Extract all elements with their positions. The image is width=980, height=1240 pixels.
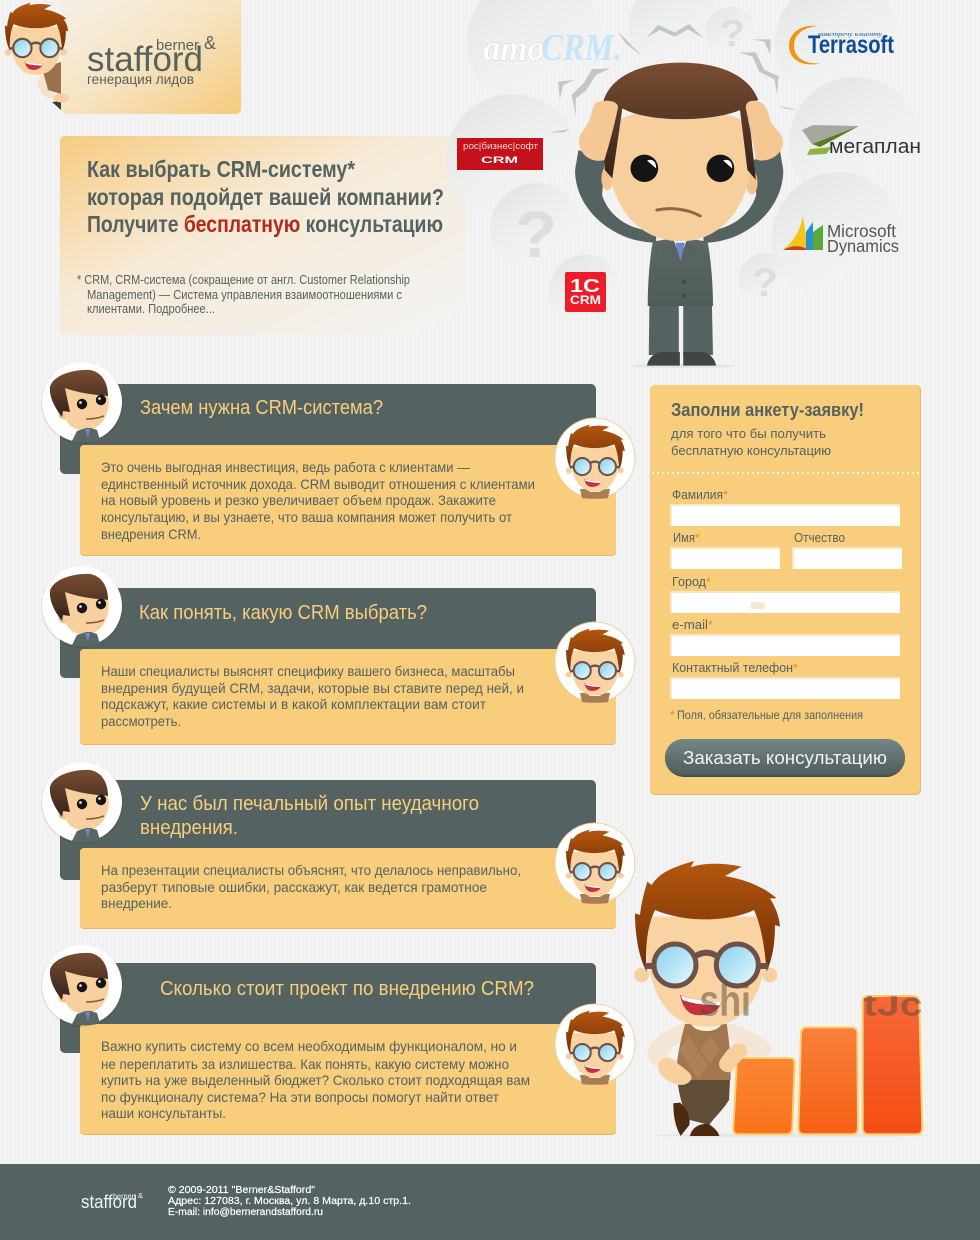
footer contacts: Адрес: 127083, г. Москва, ул. 8 Марта, д.10 стр.1. (168, 1196, 411, 1207)
answer card: внедрения будущей CRM, задачи, которые вы ставите перед ней, и (101, 680, 524, 696)
logo: Microsoft Dynamics: Dynamics (827, 236, 899, 256)
logo panel (5, 0, 241, 114)
answer card (80, 848, 616, 929)
answer card: рассмотреть. (101, 713, 181, 729)
logo: 1C CRM (565, 272, 606, 312)
stock watermark: tJc (863, 987, 923, 1024)
answer card: на новый уровень и резко увеличивает объем продаж. Закажите (101, 492, 496, 508)
logo: Terrasoft (789, 26, 895, 64)
head (634, 861, 780, 1027)
legs and shoes (647, 305, 716, 366)
logo: amoCRM (483, 27, 622, 69)
hands (579, 101, 783, 161)
answer card: Важно купить систему со всем необходимым функционалом, но и (101, 1038, 517, 1054)
arms (575, 150, 783, 243)
field: last name: Фамилия (672, 488, 723, 502)
answer card: Это очень выгодная инвестиция, ведь работа с клиентами — (101, 459, 470, 475)
field: patronymic (792, 531, 902, 569)
answer card (80, 445, 616, 556)
answer card: внедрение. (101, 895, 172, 911)
field: patronymic: Отчество (794, 531, 845, 545)
footer logo: berner (113, 1191, 134, 1201)
hero heading line 2: которая подойдет вашей компании? (87, 184, 444, 210)
hero heading line 3: Получите бесплатную консультацию (87, 211, 443, 237)
stock watermark (700, 984, 922, 1016)
avatar: consultant (554, 418, 636, 499)
question marks: ? (515, 197, 557, 271)
question marks (515, 13, 778, 305)
question heading: Как понять, какую CRM выбрать? (139, 602, 427, 624)
form intro: бесплатную консультацию (671, 444, 831, 458)
CRM footnote: Management) — Система управления взаимоотношениями с (87, 288, 402, 302)
torso (648, 238, 713, 306)
logo: Terrasoft: навстречу клиенту (818, 31, 882, 38)
logo: Microsoft Dynamics: Microsoft (827, 221, 896, 241)
logo: Megaplan (802, 125, 921, 158)
logo: rosbiznessoft CRM: CRM (481, 155, 518, 166)
CRM footnote: * CRM, CRM-система (сокращение от англ. Customer Relationship (77, 273, 410, 287)
answer card (80, 1024, 616, 1135)
answer card: На презентации специалисты объяснят, что делалось неправильно, (101, 862, 521, 878)
field: phone (670, 661, 900, 699)
field: first name: * (695, 531, 700, 545)
answer card (80, 649, 616, 745)
field: email: * (708, 618, 713, 632)
field: first name: Имя (673, 531, 695, 545)
illustration: consultant with growth bars (634, 861, 928, 1137)
field: city: * (706, 575, 711, 589)
avatar: man (41, 945, 123, 1027)
question heading: внедрения. (140, 817, 238, 839)
field: phone: Контактный телефон (672, 661, 793, 675)
avatar: consultant (554, 622, 636, 703)
footer logo: & (138, 1193, 143, 1200)
footer contacts (168, 1185, 411, 1218)
hero panel (60, 136, 465, 335)
field: city (670, 575, 900, 613)
answer card: по функционалу система? На эти вопросы помогут найти ответ (101, 1089, 500, 1105)
avatar: man (41, 566, 123, 648)
logo: amoCRM: CRM. (541, 27, 622, 69)
panel: request form (650, 385, 921, 795)
question marks: ? (720, 13, 745, 55)
CRM footnote (77, 273, 410, 316)
stock watermark: shi (699, 978, 751, 1026)
field: last name (670, 488, 900, 526)
field: last name: * (723, 488, 728, 502)
footer contacts: E-mail: info@bernerandstafford.ru (168, 1207, 323, 1218)
panel: why CRM (41, 362, 636, 556)
logo: rosbiznessoft CRM (457, 138, 543, 170)
logo wordmark: berner (156, 37, 199, 54)
stress marks (550, 24, 798, 132)
form heading: Заполни анкету-заявку! (671, 399, 864, 420)
field: city: Город (672, 575, 707, 589)
form intro (671, 427, 831, 458)
question heading (140, 793, 479, 839)
body (647, 1021, 772, 1136)
answer card: внедрения CRM. (101, 526, 201, 542)
background thought bubbles (446, 0, 921, 327)
question heading: Зачем нужна CRM-система? (140, 397, 383, 419)
answer card: подскажут, какие системы и в какой комплектации вам стоит (101, 696, 487, 712)
head (601, 63, 758, 241)
answer card: Наши специалисты выяснят специфику вашего бизнеса, масштабы (101, 663, 515, 679)
answer card: наши консультанты. (101, 1105, 226, 1121)
panel: bad experience (41, 762, 636, 929)
panel: which CRM (41, 566, 636, 745)
logo: rosbiznessoft CRM: рос|бизнес|софт (463, 141, 538, 151)
answer card: консультацию, и вы узнаете, что ваша компания может получить от (101, 509, 513, 525)
field: email (670, 618, 900, 656)
question marks: ? (752, 261, 778, 305)
logo wordmark: генерация лидов (87, 72, 194, 87)
logo mascot (5, 3, 69, 110)
illustration: confused man (550, 24, 798, 368)
footer contacts: © 2009-2011 "Berner&Stafford" (168, 1185, 315, 1196)
avatar: man (41, 762, 123, 844)
logo wordmark: stafford (87, 40, 203, 79)
bar chart (733, 996, 922, 1134)
required fields note: * (670, 708, 675, 722)
question heading: У нас был печальный опыт неудачного (140, 793, 479, 815)
logo wordmark: & (204, 33, 216, 53)
form intro: для того что бы получить (671, 427, 826, 441)
logo: Microsoft Dynamics (783, 216, 899, 256)
required fields note: Поля, обязательные для заполнения (677, 708, 863, 722)
logo: 1C CRM: 1С (570, 276, 600, 296)
avatar: man (41, 362, 123, 444)
logo: Megaplan: мегаплан (829, 136, 921, 158)
hero heading: Как выбрать CRM-систему* (87, 156, 355, 182)
submit button: Заказать консультацию (683, 747, 887, 768)
field: first name (670, 531, 780, 569)
field: phone: * (793, 661, 798, 675)
answer card: купить на уже выделенный бюджет? Сколько стоит подходящая вам (101, 1072, 530, 1088)
answer card: не переплатить за излишества. Как понять, какую систему можно (101, 1056, 509, 1072)
panel: project cost (41, 945, 636, 1135)
logo: 1C CRM: CRM (570, 295, 601, 307)
submit button (665, 739, 905, 777)
logo: Terrasoft: Terrasoft (808, 31, 895, 59)
footer logo: stafford (81, 1192, 137, 1212)
logo: amoCRM: amo (483, 28, 545, 68)
question heading: Сколько стоит проект по внедрению CRM? (160, 978, 534, 1000)
field: email: e-mail (672, 618, 708, 632)
footer (0, 1164, 980, 1240)
avatar: consultant (554, 822, 636, 904)
CRM footnote: клиентами. Подробнее... (87, 302, 215, 316)
avatar: consultant (554, 1004, 636, 1085)
answer card: разберут типовые ошибки, расскажут, как ведется грамотное (101, 879, 487, 895)
answer card: единственный источник дохода. CRM выводит отношения с клиентами (101, 476, 535, 492)
logo wordmark (87, 33, 216, 87)
